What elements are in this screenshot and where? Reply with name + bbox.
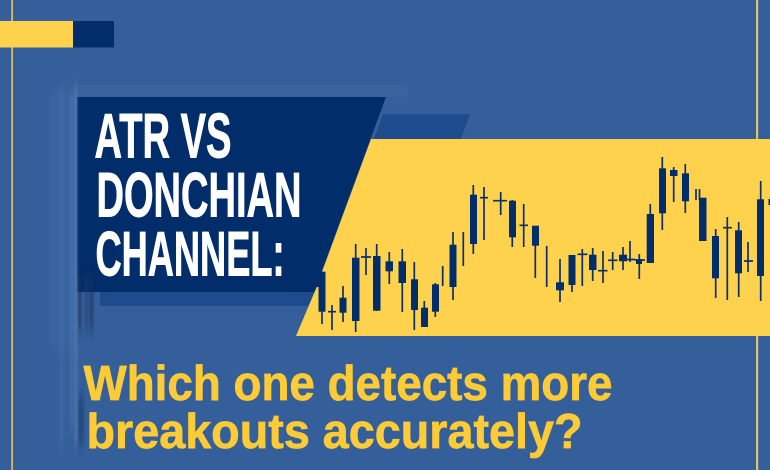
title text: ATR VS <box>94 102 232 172</box>
left vertical accent line <box>11 0 13 470</box>
band behind chart, upper <box>374 114 470 139</box>
title panel <box>77 97 386 292</box>
title text <box>94 102 302 290</box>
subheading text <box>84 357 612 459</box>
top-left accent bar <box>0 21 114 48</box>
title text: DONCHIAN <box>96 160 302 230</box>
soft light band above title panel <box>77 85 407 97</box>
right vertical accent line <box>756 0 758 470</box>
title text: CHANNEL: <box>96 220 284 290</box>
subheading text: Which one detects more <box>84 357 612 411</box>
band behind title panel, lower <box>100 292 322 306</box>
subheading text: breakouts accurately? <box>86 405 582 459</box>
candlestick chart <box>318 157 770 332</box>
chart panel <box>296 139 770 336</box>
left smeared artefact strip <box>50 85 93 450</box>
